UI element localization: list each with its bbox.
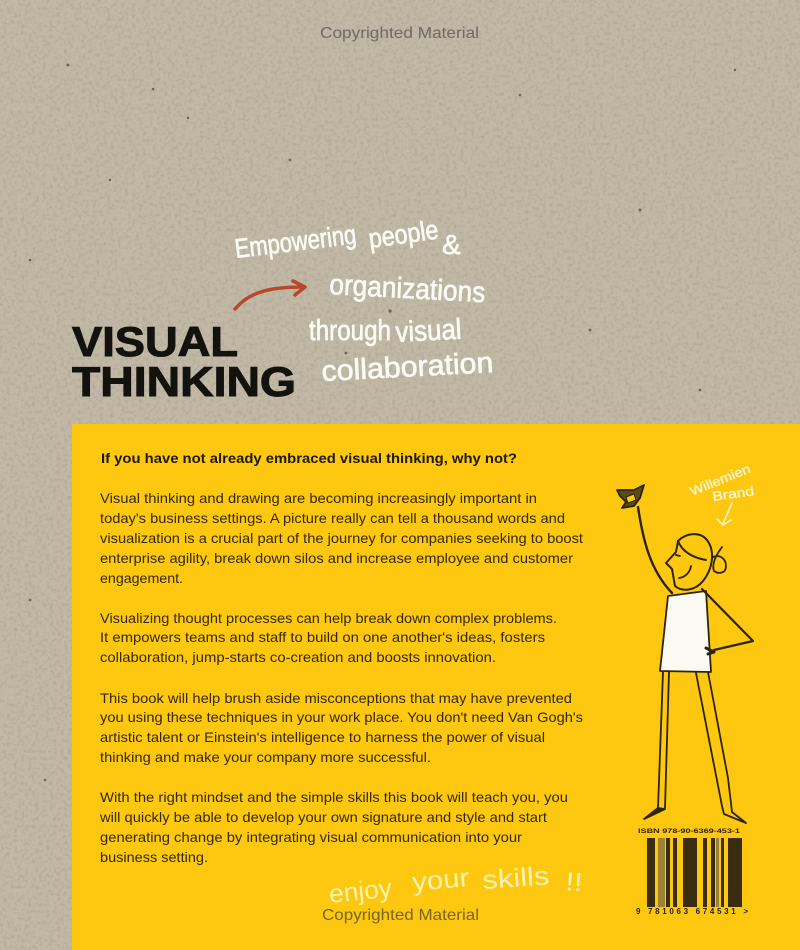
handwritten sign-off: !! — [565, 866, 584, 897]
title: THINKING — [72, 358, 296, 405]
watermark: top: Copyrighted Material — [320, 25, 479, 42]
text block: blurb: generating change by integrating visual communication into your — [100, 829, 522, 845]
title: VISUAL — [72, 318, 238, 365]
bars — [647, 838, 742, 907]
text block: blurb: thinking and make your company more successful. — [100, 749, 431, 765]
illustration: standing figure — [617, 485, 753, 823]
handwritten tagline: & — [442, 229, 461, 260]
text block: blurb: Visual thinking and drawing are becoming increasingly important in — [100, 490, 537, 506]
text block: blurb: business setting. — [100, 849, 208, 865]
smile — [679, 566, 691, 578]
arm on hip — [702, 589, 753, 650]
text block: blurb: engagement. — [100, 570, 183, 586]
text block: blurb: collaboration, jump-starts co-creation and boosts innovation. — [100, 649, 496, 665]
title — [72, 318, 296, 405]
text block: blurb: This book will help brush aside misconceptions that may have prevented — [100, 690, 572, 706]
eye — [676, 555, 680, 556]
heading: question: If you have not already embraced visual thinking, why not? — [101, 451, 517, 466]
text block: blurb: today's business settings. A picture really can tell a thousand words and — [100, 510, 565, 526]
right shoe — [722, 806, 746, 823]
icon: small arrow to figure — [717, 503, 732, 525]
panel: yellow back cover block — [72, 424, 800, 950]
text block: blurb: visualization is a crucial part of the journey for companies seeking to boost — [100, 530, 583, 546]
left shoe — [644, 808, 665, 819]
text block: blurb: enterprise agility, break down silos and increase employee and customer — [100, 550, 573, 566]
handwritten author name: Brand — [711, 483, 755, 504]
text block: blurb: Visualizing thought processes can help break down complex problems. — [100, 610, 557, 626]
text block: blurb: With the right mindset and the simple skills this book will teach you, you — [100, 789, 568, 805]
handwritten author name: Willemien — [688, 461, 752, 499]
handwritten sign-off — [327, 860, 584, 909]
head — [666, 534, 712, 590]
text block: blurb: you using these techniques in your work place. You don't need Van Gogh's — [100, 709, 583, 725]
barcode digits: 9 781063 674531 > — [636, 907, 748, 916]
text block: blurb — [99, 490, 583, 865]
handwritten tagline — [233, 214, 494, 388]
watermark: bottom: Copyrighted Material — [322, 907, 479, 924]
handwritten sign-off: skills — [481, 860, 550, 895]
hairline — [678, 541, 706, 560]
text block: blurb: It empowers teams and staff to build on one another's ideas, fosters — [100, 629, 545, 645]
handwritten tagline: collaboration — [321, 347, 494, 388]
handwritten tagline: people — [367, 214, 440, 254]
handwritten sign-off: your — [411, 862, 471, 897]
handwritten tagline: visual — [395, 314, 462, 349]
handwritten sign-off: enjoy — [327, 873, 393, 909]
hand and marker — [617, 485, 644, 508]
left leg — [658, 672, 669, 808]
handwritten tagline: organizations — [329, 269, 486, 309]
barcode — [636, 828, 748, 916]
raised arm — [638, 507, 672, 593]
text block: blurb: will quickly be able to develop your own signature and style and start — [99, 809, 547, 825]
shirt — [660, 591, 711, 672]
icon: red arrow — [235, 281, 305, 309]
handwritten author name — [688, 461, 755, 504]
handwritten tagline: Empowering — [233, 219, 358, 264]
hair bun — [712, 547, 726, 573]
ISBN label: ISBN 978-90-6369-453-1 — [638, 828, 741, 835]
handwritten tagline: through — [309, 315, 391, 347]
right leg — [696, 672, 732, 812]
text block: blurb: artistic talent or Einstein's intelligence to harness the power of visual — [100, 729, 545, 745]
